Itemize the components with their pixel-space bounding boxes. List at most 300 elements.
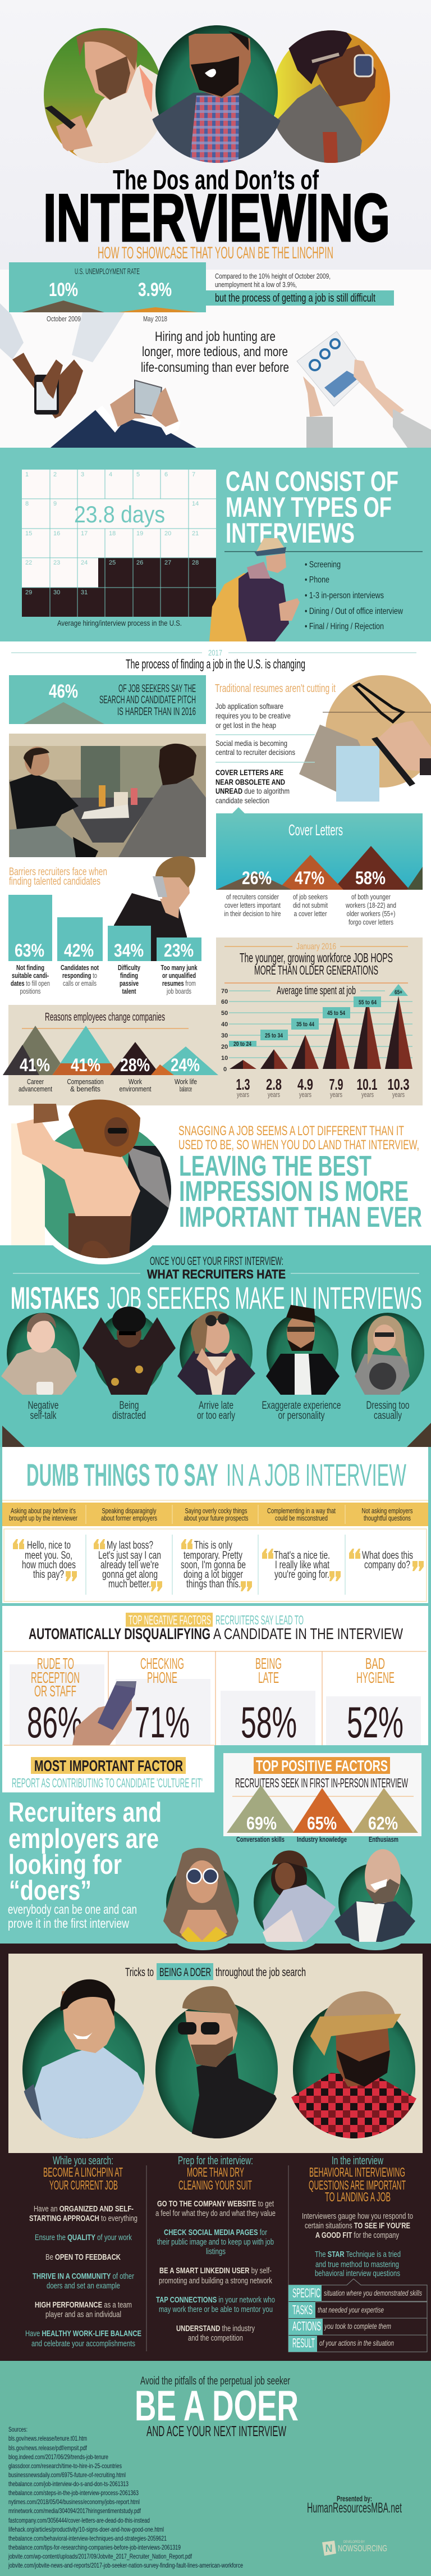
bar labels: responding to	[62, 971, 97, 980]
labels	[19, 1077, 197, 1093]
logo: NowSourcing	[322, 2541, 387, 2556]
tips: Ensure the QUALITY of your work	[35, 2233, 132, 2242]
closing heading: AND ACE YOUR NEXT INTERVIEW	[146, 2423, 286, 2440]
panel: dumb things topics: Asking about pay before it's	[11, 1507, 76, 1515]
stats: 28%	[120, 1055, 150, 1075]
stats	[20, 1055, 200, 1075]
column: in the interview	[288, 2155, 427, 2352]
factor labels: RUDE TO	[37, 1655, 74, 1672]
chart: years values: 4.9	[297, 1076, 313, 1093]
text block	[302, 2211, 413, 2278]
list: interview types: • Final / Hiring / Rejection	[305, 622, 384, 631]
bar labels: dates to fill open	[11, 979, 50, 987]
labels: environment	[119, 1085, 152, 1093]
factor labels	[31, 1655, 395, 1700]
panel: top positive factors	[223, 1753, 421, 1836]
sources: jobvite.com/jobvite-news-and-reports/2017-job-seeker-nation-survey-finding-fault-lines-american-workforce	[8, 2561, 243, 2569]
bar labels	[11, 963, 198, 995]
sources: thebalance.com/behavioral-interview-techniques-and-strategies-2059621	[8, 2534, 167, 2542]
header section	[0, 0, 431, 270]
bar labels: suitable candi-	[12, 971, 49, 980]
panel: cover letters	[216, 807, 423, 890]
text block: A GOOD FIT for the company	[315, 2231, 399, 2240]
heading: 2017 process: The process of finding a job in the U.S. is changing	[126, 657, 305, 671]
bar labels: Candidates not	[61, 963, 99, 972]
stats: 41%	[71, 1055, 100, 1075]
bar labels: resumes from	[162, 979, 196, 987]
mistakes captions: Being	[119, 1400, 139, 1412]
panel: reasons employees change companies	[3, 1005, 218, 1105]
chart: age labels: 65+	[395, 989, 402, 996]
STAR table: SPECIFIC	[292, 2286, 320, 2300]
text block: resume points	[216, 702, 315, 805]
labels: advancement	[19, 1085, 52, 1093]
heading: In the interview	[332, 2155, 383, 2167]
heading: CLEANING YOUR SUIT	[178, 2178, 252, 2192]
portrait: man in hat and plaid	[286, 1991, 420, 2138]
photo: man with phone	[44, 28, 159, 163]
heading: dumb things: DUMB THINGS TO SAY	[26, 1457, 218, 1492]
tips	[155, 2199, 276, 2343]
quote text: this pay?	[33, 1569, 64, 1581]
quote text: Hello, nice to	[27, 1540, 71, 1551]
panel: cover letters: 58%	[355, 868, 386, 888]
sources: bls.gov/news.release/tenure.t01.htm	[8, 2434, 87, 2442]
tips: STARTING APPROACH to everything	[29, 2214, 137, 2223]
panel: interview types	[0, 448, 431, 641]
bar labels: or unqualified	[162, 971, 196, 980]
presenter	[307, 2494, 402, 2516]
panel: dumb things topics	[2, 1500, 428, 1526]
sources: businessnewsdaily.com/6975-future-of-recruiting.html	[8, 2471, 126, 2479]
chart: years values: 10.1	[357, 1076, 377, 1093]
bar labels: job boards	[166, 987, 191, 995]
tips: may work there or be able to mentor you	[159, 2305, 273, 2314]
bar: 42%	[57, 917, 103, 961]
text block: resume points: requires you to be creative	[216, 711, 291, 720]
heading: Tricks to	[125, 1966, 154, 1979]
quote marks	[13, 1539, 424, 1591]
chart: gridlines and axis: 50	[221, 1010, 228, 1017]
sources: jobvite.com/wp-content/uploads/2017/09/Jobvite_2017_Recruiter_Nation_Report.pdf	[8, 2552, 192, 2560]
logo: NowSourcing: DEVELOPED BY	[343, 2541, 365, 2544]
date labels: October 2009	[47, 315, 81, 323]
sources: thebalance.com/job-interview-do-s-and-don-ts-2061313	[8, 2480, 129, 2488]
panel: mistakes background	[0, 1105, 431, 1447]
chart: years values: 2.8	[266, 1076, 282, 1093]
heading: U.S. UNEMPLOYMENT RATE	[75, 267, 140, 276]
heading: INTERVIEWS	[226, 517, 355, 549]
panel: dumb things topics: about your future prospects	[184, 1514, 249, 1522]
text block: resume points: Job application software	[216, 702, 283, 711]
photo: hands on tablet	[297, 331, 431, 448]
heading: mistakes: MISTAKES	[11, 1280, 99, 1316]
text block: hiring: longer, more tedious, and more	[142, 344, 288, 359]
tips: GO TO THE COMPANY WEBSITE to get	[157, 2199, 274, 2209]
cover letter captions: a cover letter	[294, 909, 327, 918]
bar chart: barriers	[8, 895, 201, 961]
photo: man with backpack	[209, 538, 300, 641]
sources: nytimes.com/2018/05/04/business/economy/jobs-report.html	[8, 2498, 140, 2506]
closing heading: Avoid the pitfalls of the perpetual job seeker	[140, 2375, 290, 2387]
quote text: company do?	[364, 1559, 410, 1571]
calendar: 6	[164, 471, 168, 478]
callout band	[206, 290, 394, 306]
quote text: This is only	[194, 1540, 232, 1551]
presenter: Presented by:	[337, 2494, 372, 2503]
text block: resume points: Social media is becoming	[216, 739, 287, 748]
photo: centre hands on phone and navy suit	[51, 380, 196, 448]
text block: resume points: candidate selection	[216, 796, 269, 805]
cover letter captions	[224, 893, 396, 926]
calendar: 8	[25, 500, 29, 507]
panel: 46% stat	[9, 675, 206, 724]
mistakes captions: or too early	[197, 1410, 235, 1422]
list: interview types	[305, 560, 403, 631]
calendar: 20	[164, 530, 171, 537]
panel: tricks to being a doer	[8, 1954, 423, 2153]
heading: what recruiters hate	[13, 1255, 419, 1281]
heading: throughout the job search	[216, 1966, 306, 1979]
stats: 26%	[242, 868, 272, 888]
tips: BE A SMART LINKEDIN USER by self-	[159, 2266, 272, 2275]
factor labels: HYGIENE	[356, 1669, 395, 1686]
chart: years values: years	[330, 1090, 342, 1099]
calendar caption: Average hiring/interview process in the U.S.	[57, 618, 182, 627]
heading: BEING A DOER	[159, 1966, 211, 1979]
calendar: 2	[53, 471, 57, 478]
factor labels: CHECKING	[140, 1655, 184, 1672]
photo: desk with envelope, glasses and hand	[299, 675, 431, 802]
tips: and celebrate your accomplishments	[31, 2339, 135, 2349]
portrait: man in black turtleneck	[155, 1986, 281, 2138]
date rule: January 2016	[296, 942, 336, 952]
chart: gridlines and axis: 70	[221, 988, 228, 995]
mistakes captions: Negative	[28, 1400, 58, 1412]
mistakes captions: Arrive late	[199, 1400, 233, 1412]
tips: Be OPEN TO FEEDBACK	[45, 2252, 121, 2262]
heading: MORE THAN DRY	[187, 2165, 244, 2179]
sources: thebalance.com/tips-for-researching-companies-before-job-interviews-2061319	[8, 2543, 181, 2551]
quote text: That's a nice tie.	[274, 1550, 330, 1562]
closing heading: BE A DOER	[135, 2382, 299, 2430]
panel: most important factor	[12, 1757, 203, 1790]
list: interview types: • 1-3 in-person interviews	[305, 591, 384, 600]
column: while you search	[25, 2155, 141, 2349]
chart: gridlines and axis: 0	[223, 1066, 227, 1073]
quote text: meet you. So,	[25, 1550, 72, 1562]
positive factor labels	[236, 1835, 398, 1844]
stat: 10%: 10%	[49, 279, 78, 301]
text block: hiring: Hiring and job hunting are	[155, 329, 276, 344]
calendar: 14	[192, 500, 199, 507]
calendar: 23	[53, 559, 60, 566]
cover letter captions: forgo cover letters	[349, 918, 393, 926]
panel: top positive factors: 65%	[307, 1813, 337, 1833]
stats: 41%	[20, 1055, 50, 1075]
photo: man on phone	[114, 856, 195, 961]
column dividers	[146, 2165, 288, 2351]
heading: barriers: Barriers recruiters face when	[9, 866, 107, 878]
calendar: 9	[53, 500, 57, 507]
chart: gridlines and axis	[221, 988, 412, 1073]
chart: gridlines and axis: 20	[221, 1044, 228, 1050]
callout band: but the process of getting a job is still difficult	[215, 292, 375, 304]
list: interview types: • Dining / Out of office interview	[305, 607, 403, 616]
quote text: you're going for.	[274, 1569, 329, 1581]
quote text: soon, I'm gonna be	[181, 1559, 246, 1571]
calendar	[22, 470, 216, 617]
calendar: 24	[81, 559, 88, 566]
mistakes captions: self-talk	[30, 1410, 57, 1422]
tips: Have HEALTHY WORK-LIFE BALANCE	[25, 2329, 141, 2338]
bar labels: Difficulty	[118, 963, 141, 972]
quote text: Let's just say I can	[98, 1550, 161, 1562]
chart: gridlines and axis: 40	[221, 1021, 228, 1028]
stats: 69%	[246, 1813, 277, 1833]
calendar: 27	[164, 559, 171, 566]
portrait: arrive late	[177, 1311, 255, 1395]
text block: and true method to mastering	[315, 2260, 399, 2269]
panel: top positive factors: 62%	[368, 1813, 398, 1833]
heading	[224, 950, 408, 983]
text block: resume points: or get lost in the heap	[216, 721, 276, 730]
sources: fastcompany.com/3056444/cover-letters-are-dead-do-this-instead	[8, 2516, 150, 2524]
icon: hand holding phone	[72, 1681, 136, 1745]
calendar: 18	[109, 530, 116, 537]
calendar: 21	[192, 530, 199, 537]
STAR table: of your actions in the situation	[319, 2338, 394, 2347]
text block: behavioral interview questions	[315, 2269, 400, 2278]
factor labels: RECEPTION	[31, 1669, 80, 1686]
cover letter captions: of job seekers	[293, 893, 328, 901]
panel: 46% stat: IS HARDER THAN IN 2016	[117, 706, 196, 718]
positive factor labels: Industry knowledge	[297, 1835, 347, 1844]
calendar: 28	[192, 559, 199, 566]
calendar: 29	[25, 589, 32, 596]
calendar: 4	[109, 471, 112, 478]
portrait: woman with beret	[254, 1850, 336, 1942]
labels: Work	[129, 1077, 142, 1086]
heading: looking for doers: looking for	[8, 1850, 122, 1880]
chart: years values: years	[392, 1090, 405, 1099]
STAR table	[288, 2279, 427, 2352]
text block: hiring: life-consuming than ever before	[141, 360, 289, 375]
heading	[178, 2155, 253, 2192]
heading: negative factors: RECRUITERS SAY LEAD TO	[216, 1613, 304, 1627]
sources: lifehack.org/articles/productivity/10-signs-doer-and-how-good-one.html	[8, 2525, 164, 2533]
sources	[8, 2425, 243, 2569]
text block: resume points: central to recruiter decisions	[216, 748, 295, 757]
panel: most important factor: REPORT AS CONTRIBUTING TO CANDIDATE 'CULTURE FIT'	[12, 1776, 203, 1790]
calendar: 15	[25, 530, 32, 537]
heading: barriers: finding talented candidates	[9, 876, 100, 888]
cover letter captions: of recruiters consider	[226, 893, 279, 901]
tips: CHECK SOCIAL MEDIA PAGES for	[164, 2228, 267, 2237]
cover letter captions: cover letters important	[224, 901, 281, 909]
panel: 46% stat: 46%	[49, 681, 78, 702]
bar labels: talent	[122, 987, 136, 995]
portrait: exaggerate experience	[266, 1305, 340, 1395]
panel: dumb things topics: Saying overly cocky things	[185, 1507, 247, 1515]
bar: 34%: 34%	[114, 940, 144, 961]
stat: 3.9%: 3.9%	[138, 279, 172, 301]
quote text: things than this.	[186, 1578, 241, 1590]
panel: dumb things topics: Complementing in a way that	[267, 1507, 336, 1515]
heading: Cover Letters	[288, 821, 343, 839]
tips: Have an ORGANIZED AND SELF-	[34, 2204, 134, 2214]
bar labels: calls or emails	[63, 979, 97, 987]
cover letter captions: older workers (55+)	[347, 909, 395, 918]
bar: 23%	[157, 937, 201, 961]
factor numbers: 86%	[27, 1697, 82, 1747]
portrait: negative self-talk	[1, 1313, 80, 1395]
tips: promoting and building a strong network	[159, 2276, 272, 2286]
factor labels: BEING	[255, 1655, 282, 1672]
chart: years values: 7.9	[329, 1076, 343, 1093]
heading	[43, 2155, 123, 2192]
list: interview types: • Phone	[305, 575, 329, 585]
mistakes captions: Dressing too	[366, 1400, 410, 1412]
chart: pyramids	[230, 996, 412, 1069]
heading: negative factors: AUTOMATICALLY DISQUALIFYING	[29, 1625, 210, 1642]
panel: 46% stat: OF JOB SEEKERS SAY THE	[118, 683, 196, 695]
chart title: Average time spent at job	[277, 985, 356, 997]
tips: listings	[206, 2247, 226, 2256]
positive factor labels: Enthusiasm	[369, 1835, 398, 1844]
heading: YOUR CURRENT JOB	[49, 2178, 118, 2192]
calendar: 3	[81, 471, 84, 478]
text block: certain situations TO SEE IF YOU'RE	[305, 2221, 410, 2231]
heading: BECOME A LINCHPIN AT	[43, 2165, 123, 2179]
quote text: I really like what	[275, 1559, 330, 1571]
tips: a feel for what they do and what they value	[155, 2209, 276, 2218]
chart: years values: years	[237, 1090, 249, 1099]
heading: 2017 process: 2017	[208, 648, 222, 658]
bar: 23%: 23%	[164, 940, 194, 961]
bar: 34%	[108, 926, 151, 961]
text block: resume points: NEAR OBSOLETE AND	[216, 777, 285, 786]
panel: dumb things topics: about former employers	[101, 1514, 157, 1522]
bar: 42%: 42%	[64, 940, 94, 961]
chart: age labels: 35 to 44	[296, 1021, 315, 1028]
heading	[226, 466, 398, 549]
triangles	[227, 1785, 295, 1833]
panel: footer	[0, 2361, 431, 2576]
factor numbers: 58%	[241, 1697, 297, 1747]
heading: what recruiters hate: ONCE YOU GET YOUR FIRST INTERVIEW:	[150, 1255, 283, 1268]
bar labels: passive	[120, 979, 139, 987]
heading: looking for doers: “doers”	[9, 1876, 91, 1906]
calendar: 17	[81, 530, 88, 537]
list: interview types: • Screening	[305, 560, 341, 570]
date labels: May 2018	[143, 315, 167, 323]
photo: left hands on phone	[0, 303, 125, 418]
portrait: dressing too casually	[351, 1313, 424, 1395]
heading: looking for doers	[8, 1797, 162, 1931]
calendar: 7	[192, 471, 195, 478]
cover letter captions: in their decision to hire	[224, 909, 281, 918]
closing heading	[135, 2375, 299, 2440]
framed panels background	[0, 1447, 431, 1944]
quote text: gonna get along	[102, 1569, 158, 1581]
heading: 2017 process	[11, 648, 416, 671]
mistakes captions: or personality	[278, 1410, 325, 1422]
heading: looking for doers: employers are	[8, 1824, 159, 1854]
calendar: 25	[109, 559, 116, 566]
chart: years values	[236, 1076, 410, 1099]
heading: looking for doers: Recruiters and	[8, 1797, 162, 1828]
calendar: 26	[136, 559, 143, 566]
sources: bls.gov/news.release/pdf/empsit.pdf	[8, 2444, 87, 2452]
text block: resume points: UNREAD due to algorithm	[216, 786, 290, 795]
mistakes captions: distracted	[112, 1410, 146, 1422]
chart: years values: 1.3	[236, 1076, 250, 1093]
quote text: much better.	[108, 1578, 151, 1590]
sources: blog.indeed.com/2017/06/29/trends-job-tenure	[8, 2453, 108, 2461]
heading: looking for doers: everybody can be one and can	[8, 1902, 137, 1917]
chart: age labels: 55 to 64	[359, 999, 377, 1006]
heading: Reasons employees change companies	[45, 1011, 165, 1023]
tips: THRIVE IN A COMMUNITY of other	[33, 2272, 134, 2281]
quote text: how much does	[22, 1559, 76, 1571]
heading	[125, 1963, 306, 1980]
calendar: 31	[81, 589, 88, 596]
panel: job hopping chart	[216, 937, 423, 1105]
heading: Prep for the interview:	[178, 2155, 253, 2167]
panel: dumb things topics: thoughtful questions	[364, 1514, 411, 1522]
STAR table: RESULT	[292, 2336, 315, 2350]
cover letter captions: workers (18-22) and	[345, 901, 396, 909]
sources: glassdoor.com/research/time-to-hire-in-25-countries	[8, 2462, 122, 2470]
text block: resume points: COVER LETTERS ARE	[216, 768, 283, 777]
heading: looking for doers: prove it in the first interview	[8, 1916, 129, 1931]
factor numbers	[27, 1697, 404, 1747]
portrait: being distracted	[82, 1307, 176, 1395]
chart: age labels: 20 to 24	[233, 1041, 252, 1048]
bar: 63%: 63%	[15, 940, 44, 961]
calendar: 5	[136, 471, 140, 478]
panel: cover letters: 47%	[295, 868, 324, 888]
tips: UNDERSTAND the industry	[176, 2324, 255, 2333]
factor numbers: 71%	[135, 1697, 190, 1747]
headline: snagging a job	[178, 1123, 422, 1233]
bar labels: Not finding	[16, 963, 44, 972]
panel: dumb quotes	[4, 1529, 427, 1601]
tips: and the competition	[188, 2333, 243, 2343]
dark section background	[0, 1928, 431, 2361]
panel: dumb things topics: could be misconstrued	[275, 1514, 328, 1522]
labels: balance	[180, 1085, 192, 1093]
text block: hiring	[141, 329, 289, 375]
photo: woman with braids	[152, 25, 281, 163]
chart: gridlines and axis: 10	[221, 1055, 228, 1062]
labels: Career	[27, 1077, 44, 1086]
quote text: doing a lot bigger	[184, 1569, 243, 1581]
photo: woman in peach sweater	[11, 1100, 177, 1264]
unemployment text: Compared to the 10% height of October 2009,	[215, 272, 331, 280]
heading: traditional resumes: Traditional resumes aren't cutting it	[215, 682, 336, 695]
quote text: My last boss?	[107, 1540, 153, 1551]
chart: age labels: 45 to 54	[327, 1010, 346, 1017]
mistakes captions: Exaggerate experience	[262, 1400, 341, 1412]
heading	[309, 2155, 406, 2204]
tips	[25, 2204, 141, 2349]
quote text	[22, 1540, 413, 1590]
quote text: What does this	[362, 1550, 413, 1562]
bar: 63%	[8, 895, 52, 961]
heading: negative factors	[29, 1613, 403, 1642]
